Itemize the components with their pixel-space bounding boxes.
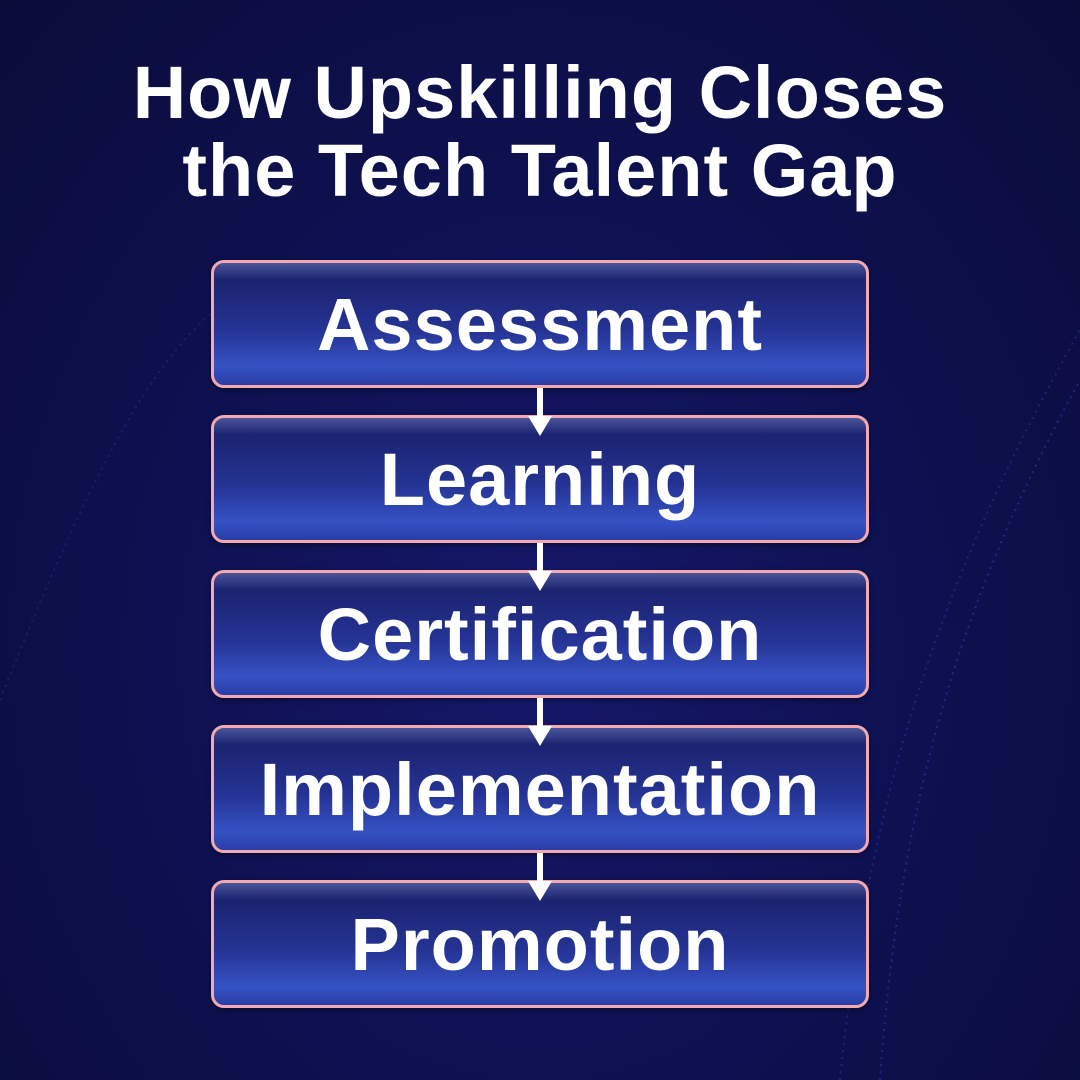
title: [133, 51, 947, 212]
step: Learning: Learning: [380, 438, 700, 521]
step: Promotion: Promotion: [351, 903, 729, 986]
step: Implementation: [211, 725, 869, 853]
step: Learning: [211, 415, 869, 543]
step: Assessment: Assessment: [317, 283, 763, 366]
step: Promotion: [211, 880, 869, 1008]
title: How Upskilling Closes: [133, 51, 947, 134]
arrow 1: [528, 388, 552, 436]
arrow 4: [528, 853, 552, 901]
step: Assessment: [211, 260, 869, 388]
step: Certification: [211, 570, 869, 698]
arrow 2: [528, 543, 552, 591]
title: the Tech Talent Gap: [182, 129, 898, 212]
step: Implementation: Implementation: [260, 748, 820, 831]
step: Certification: Certification: [318, 593, 762, 676]
arrow 3: [528, 698, 552, 746]
